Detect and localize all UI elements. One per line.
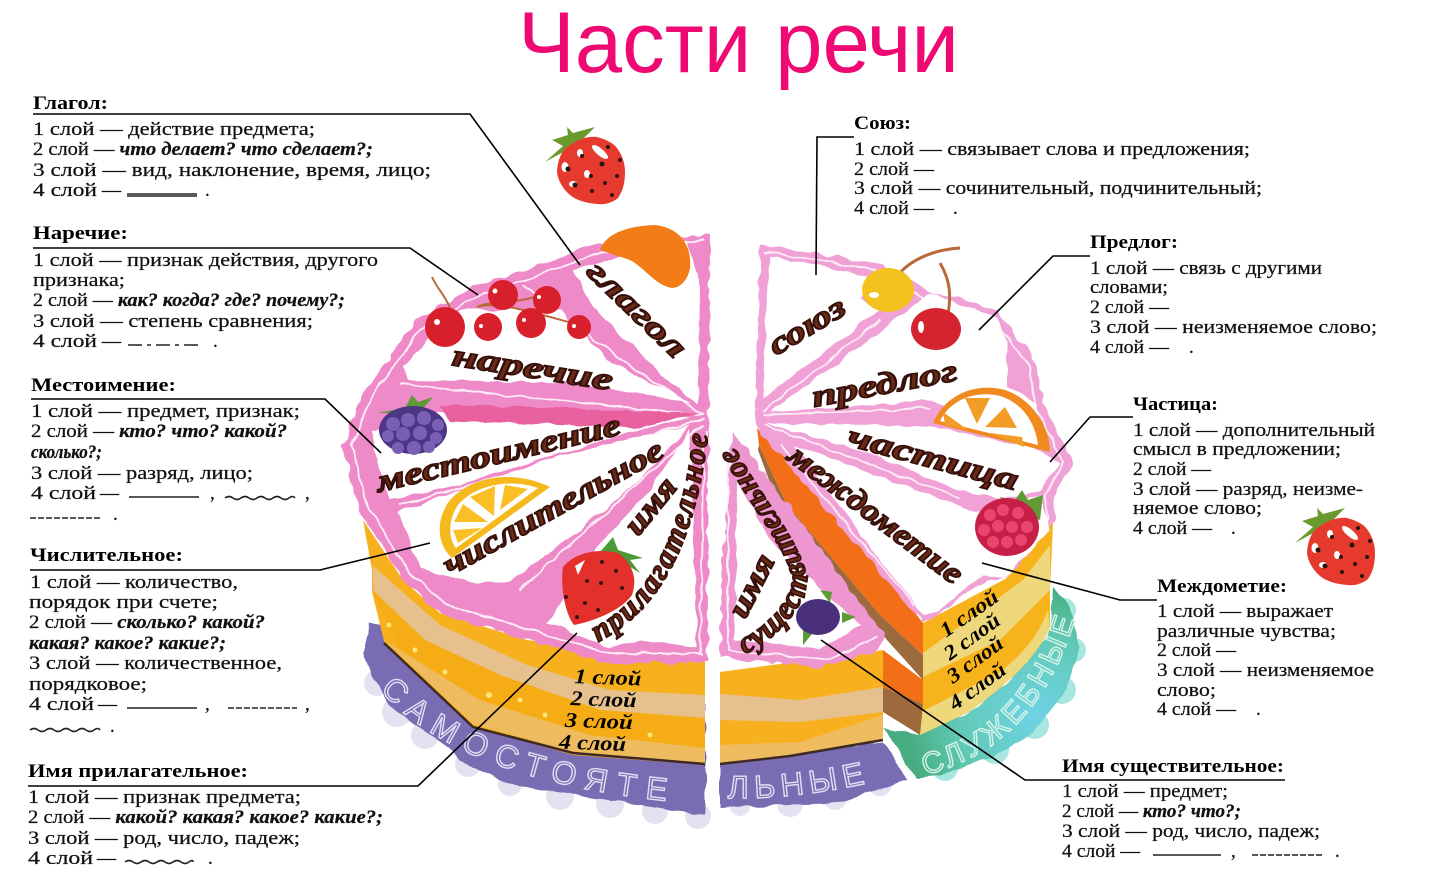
block: Междометие: 2 слой — [1157, 640, 1237, 661]
block: Глагол: 3 слой — вид, наклонение, время, лицо; [33, 160, 431, 181]
frosting: right slices [735, 257, 1060, 648]
block: Имя существительное: , [1231, 841, 1236, 862]
block: Глагол: 2 слой — что делает? что сделает?; [33, 139, 373, 160]
block: Частица: . [1231, 518, 1236, 539]
doily: purple [363, 623, 711, 829]
cream word: союз: союз [762, 289, 852, 362]
block: Предлог [1090, 232, 1377, 358]
layer labels: right [942, 588, 1006, 709]
fruit: peach slice [600, 225, 690, 288]
leader line: Числительное [30, 543, 430, 570]
block: Числительное: — [97, 694, 118, 715]
layer labels: right: 2 слой [938, 608, 1005, 666]
frosting: pink base [342, 234, 710, 663]
block: Союз [854, 113, 1262, 219]
leader line: Наречие [33, 248, 478, 295]
block: Числительное: , [205, 694, 210, 715]
block: Имя существительное: 3 слой — род, число, падеж; [1062, 821, 1320, 842]
block: Союз: 3 слой — сочинительный, подчинительный; [854, 178, 1262, 199]
fruit: lemon slice [440, 477, 550, 558]
frosting: slices [372, 240, 700, 648]
cake side layers [363, 520, 705, 765]
block: Предлог: 1 слой — связь с другими [1090, 258, 1322, 279]
leader line: Местоимение [31, 399, 381, 453]
doily text: СЛУЖЕБНЫЕ: СЛУЖЕБНЫЕ [922, 614, 1076, 774]
block: Местоимение: 3 слой — разряд, лицо; [31, 463, 253, 484]
fruit: raspberry [975, 490, 1043, 556]
block: Имя прилагательное: 4 слой [28, 848, 93, 869]
icon: strawberry right [1295, 508, 1375, 585]
block: Частица [1133, 394, 1375, 539]
block: Местоимение: 1 слой — предмет, признак; [31, 401, 300, 422]
block: Глагол: 1 слой — действие предмета; [33, 119, 315, 140]
frosting: dark pink divider [440, 405, 700, 428]
cream word: имя (right): имя [720, 548, 782, 623]
block: Союз: . [953, 198, 958, 219]
block: Имя прилагательное: 1 слой — признак предмета; [28, 787, 301, 808]
block: Частица: няемое слово; [1133, 498, 1262, 519]
block: Междометие: Междометие: [1157, 576, 1287, 597]
block: Междометие: . [1256, 699, 1261, 720]
cream word: наречие: наречие [450, 337, 616, 397]
cream word: местоимение: местоимение [370, 407, 624, 499]
cream word: предлог: предлог [809, 352, 960, 414]
block: Имя существительное: 1 слой — предмет; [1062, 781, 1228, 802]
leader line: Междометие [982, 563, 1157, 600]
block: Частица: 1 слой — дополнительный [1133, 420, 1375, 441]
doily text: left: САМОСТОЯТЕ [384, 678, 668, 802]
block: Имя прилагательное [28, 761, 383, 869]
block: Наречие: признака; [33, 270, 125, 291]
cream word: междометие: междометие [780, 435, 971, 591]
fruit: red cherry [911, 263, 961, 350]
layer labels: right: 3 слой [941, 631, 1008, 689]
block: Имя прилагательное: Имя прилагательное: [28, 761, 248, 782]
cream word: частица: частица [844, 418, 1022, 497]
layer labels: left [558, 670, 641, 751]
doily text: ЛЬНЫЕ: ЛЬНЫЕ [727, 762, 865, 800]
block: Местоимение [30, 375, 310, 525]
block: Предлог: 3 слой — неизменяемое слово; [1090, 317, 1377, 338]
block: Междометие: 3 слой — неизменяемое [1157, 660, 1374, 681]
block: Наречие: — [101, 331, 122, 352]
block: Частица: смысл в предложении; [1133, 439, 1341, 460]
block: Числительное [29, 545, 310, 737]
block: Местоимение: , [305, 483, 310, 504]
block: Глагол: Глагол: [33, 93, 108, 114]
block: Частица: 2 слой — [1133, 459, 1212, 480]
block: Числительное: порядковое; [29, 674, 147, 695]
leader line: Имя прилагательное [28, 633, 577, 786]
block: Частица: 4 слой — [1133, 518, 1213, 539]
block: Наречие: 4 слой [33, 331, 97, 352]
block: Имя прилагательное: 3 слой — род, число, падеж; [28, 828, 300, 849]
block: Числительное: порядок при счете; [29, 592, 218, 613]
block: Глагол: — [101, 180, 122, 201]
block: Числительное: . [110, 716, 115, 737]
block: Числительное: 2 слой — сколько? какой? [29, 612, 265, 633]
block: Местоимение: 4 слой [31, 483, 96, 504]
doily: purple right [720, 742, 908, 817]
block: Междометие [1157, 576, 1374, 720]
leader line: Союз [816, 137, 854, 275]
block: Имя существительное [1062, 756, 1340, 862]
illustration: cake, right half [719, 244, 1086, 817]
cream word: глагол: глагол [580, 253, 694, 365]
leader line: Предлог [979, 256, 1090, 330]
block: Частица: Частица: [1133, 394, 1218, 415]
side layers: front [720, 650, 883, 764]
layer labels: left: 2 слой [569, 686, 637, 712]
block: Имя существительное: 4 слой — [1062, 841, 1141, 862]
side layers: right wedge [920, 522, 1053, 735]
fruit: blueberry [796, 590, 856, 645]
leader line: Глагол [33, 114, 580, 265]
block: Частица: 3 слой — разряд, неизме- [1133, 479, 1363, 500]
block: Местоимение: Местоимение: [31, 375, 176, 396]
fruit: yellow cherry [862, 248, 960, 312]
layer labels: left: 3 слой [563, 708, 633, 734]
layer labels: right: 1 слой [935, 585, 1003, 642]
block: Местоимение: — [99, 483, 120, 504]
block: Наречие: . [213, 331, 218, 352]
frosting: wavy cream piping [352, 240, 705, 654]
leader line: Частица [1050, 417, 1133, 462]
layer labels: left: 4 слой [557, 730, 626, 756]
fruit: orange slice [933, 388, 1050, 452]
block: Междометие: 1 слой — выражает [1157, 601, 1334, 622]
block: Предлог: Предлог: [1090, 232, 1178, 253]
fruit: red currants [425, 277, 591, 347]
block: Междометие: 4 слой — [1157, 699, 1237, 720]
cut face layers [757, 428, 923, 735]
block: Союз: Союз: [854, 113, 911, 134]
block: Глагол: 4 слой [33, 180, 97, 201]
block: Числительное: Числительное: [30, 545, 183, 566]
block: Наречие [33, 223, 378, 352]
block: Имя прилагательное: — [96, 848, 117, 869]
block: Имя существительное: . [1335, 841, 1340, 862]
block: Предлог: словами; [1090, 277, 1168, 298]
block: Числительное: 3 слой — количественное, [29, 653, 282, 674]
block: Числительное: 4 слой [29, 694, 94, 715]
block: Наречие: Наречие: [33, 223, 128, 244]
illustration: cake, left half [340, 225, 711, 829]
block: Числительное: 1 слой — количество, [30, 572, 238, 593]
layer labels: left: 1 слой [574, 664, 642, 690]
block: Числительное: , [305, 694, 310, 715]
block: Наречие: 1 слой — признак действия, другого [33, 250, 378, 271]
block: Местоимение: 2 слой — кто? что? какой? [31, 421, 287, 442]
block: Глагол: . [205, 180, 210, 201]
cream word: прилагательное: прилагательное [591, 433, 708, 644]
block: Местоимение: . [113, 504, 118, 525]
block: Имя прилагательное: . [208, 848, 213, 869]
block: Имя существительное: 2 слой — кто? что?; [1062, 801, 1241, 822]
block: Союз: 2 слой — [854, 159, 935, 180]
frosting: right pink base [755, 245, 1073, 623]
block: Междометие: различные чувства; [1157, 621, 1336, 642]
block: Наречие: 2 слой — как? когда? где? почему?; [33, 290, 345, 311]
cream word: числительное: числительное [436, 432, 670, 582]
block: Местоимение: сколько?; [31, 442, 102, 463]
fruit: blackberry [377, 395, 447, 455]
block: Имя прилагательное: 2 слой — какой? какая? какое? какие?; [28, 807, 383, 828]
frosting: bottom slice base [720, 432, 883, 668]
block: Предлог: . [1189, 337, 1194, 358]
block: Союз: 1 слой — связывает слова и предложения; [854, 139, 1250, 160]
block: Имя существительное: Имя существительное: [1062, 756, 1284, 777]
frosting: right wavy cream piping [728, 252, 1064, 660]
block: Предлог: 2 слой — [1090, 297, 1170, 318]
block: Глагол [33, 93, 431, 201]
block: Междометие: слово; [1157, 680, 1216, 701]
block: Предлог: 4 слой — [1090, 337, 1170, 358]
block: Числительное: какая? какое? какие?; [29, 633, 226, 654]
cream word: существительное: существительное [722, 448, 809, 656]
layer labels: right: 4 слой [943, 657, 1011, 716]
fruit: strawberry on the cake [562, 537, 643, 625]
icon: strawberry top [545, 127, 625, 204]
block: Наречие: 3 слой — степень сравнения; [33, 311, 313, 332]
doily: green [883, 587, 1086, 781]
block: Союз: 4 слой — [854, 198, 935, 219]
cream word: имя: имя [616, 470, 684, 541]
block: Местоимение: , [210, 483, 215, 504]
leader line: Имя существительное [821, 640, 1285, 780]
